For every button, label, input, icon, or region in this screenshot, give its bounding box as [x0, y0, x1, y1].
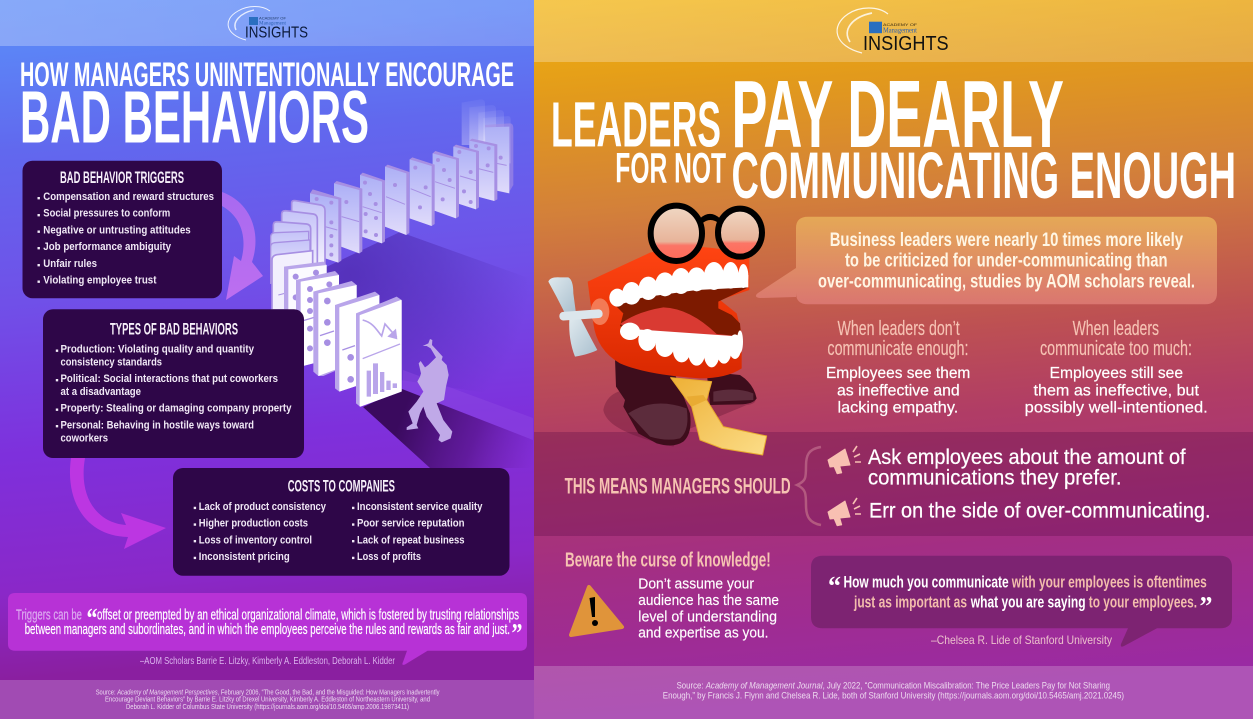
- panel: costs to companies: Lack of product consistency: [199, 501, 327, 513]
- title: [551, 61, 1236, 212]
- logo: AOM Insights: INSIGHTS: [245, 25, 308, 42]
- panel: costs to companies: Inconsistent pricing: [199, 551, 290, 563]
- title: FOR NOT: [615, 144, 726, 192]
- callout: ethical climate quote: offset or preempted by an ethical organizational climate, which is fostered by trusting relationships: [97, 606, 519, 623]
- callout: ethical climate quote: [8, 593, 527, 665]
- panel: bad behavior triggers: Compensation and reward structures: [43, 191, 214, 203]
- icon: wind-up key: [548, 277, 597, 357]
- panel: bad behavior triggers: Unfair rules: [43, 258, 97, 270]
- icon: megaphone 2: [828, 498, 861, 526]
- icon: upper teeth: [609, 262, 748, 307]
- title: BAD BEHAVIORS: [20, 76, 369, 159]
- icon: warning triangle: [571, 587, 622, 635]
- footer: source: Deborah L. Kidder of Columbus State University (https://journals.aom.org/doi/10.5465/amp.2006.19873411): [126, 704, 409, 711]
- icon: brace: [797, 447, 821, 525]
- icon: glasses: [651, 206, 762, 261]
- illustration: running man: [407, 339, 452, 442]
- column: too little communication: communicate enough:: [827, 338, 968, 360]
- logo: AOM Insights: Management: [259, 20, 286, 26]
- panel: bad behavior triggers: Job performance ambiguity: [43, 241, 172, 253]
- icon: tie: [671, 378, 767, 455]
- heading: this means managers should: THIS MEANS MANAGERS SHOULD: [565, 473, 791, 498]
- panel: types of bad behaviors: coworkers: [60, 432, 108, 444]
- panel: bad behavior triggers: [22, 161, 222, 298]
- column: too much communication: When leaders: [1073, 318, 1159, 340]
- panel: types of bad behaviors: Property: Stealing or damaging company property: [60, 403, 292, 415]
- callout: Lide quote: [811, 556, 1232, 647]
- callout: Lide quote: How much you communicate: [844, 573, 1009, 592]
- panel: costs to companies: Loss of profits: [357, 551, 421, 563]
- callout: Lide quote: what you are saying: [970, 592, 1086, 611]
- logo: AOM Insights: ACADEMY OF: [259, 16, 286, 20]
- callout: Lide quote: just as important as: [853, 592, 967, 611]
- column: too little communication: as ineffective and: [837, 382, 960, 399]
- jaw: [588, 247, 749, 378]
- column: too much communication: communicate too much:: [1040, 338, 1192, 360]
- panel: types of bad behaviors: TYPES OF BAD BEHAVIORS: [110, 320, 238, 338]
- callout: 10 times more likely: [756, 217, 1217, 304]
- panel: bad behavior triggers: BAD BEHAVIOR TRIGGERS: [60, 169, 184, 187]
- text: manager actions: communications they prefer.: [868, 467, 1122, 490]
- logo: AOM Insights: INSIGHTS: [863, 33, 949, 55]
- panel: costs to companies: COSTS TO COMPANIES: [288, 478, 395, 496]
- icon: lower teeth: [620, 323, 743, 367]
- footer: source: Enough,” by Francis J. Flynn and Chelsea R. Lide, both of Stanford University (https://journals.aom.org/doi/10.5465/amj.2021.0245): [663, 690, 1124, 701]
- footer: source: Source: Academy of Management Journal, July 2022, “Communication Miscalibration: The Price Leaders Pay for Not Sharing: [677, 680, 1110, 691]
- column: too much communication: Employees still see: [1050, 365, 1183, 382]
- attribution: –Chelsea R. Lide of Stanford University: [931, 633, 1112, 647]
- panel: types of bad behaviors: Political: Social interactions that put coworkers: [60, 373, 278, 385]
- illustration: chattering teeth: [548, 206, 767, 455]
- text: manager actions: [868, 446, 1210, 523]
- column: too little communication: lacking empathy.: [838, 400, 958, 417]
- text: curse of knowledge: Don’t assume your: [638, 575, 754, 592]
- shadow: [603, 388, 756, 447]
- arrow: types to costs: [70, 458, 166, 549]
- panel: bad behavior triggers: Violating employee trust: [43, 274, 157, 286]
- logo: AOM Insights: Management: [883, 26, 917, 34]
- panel: types of bad behaviors: Personal: Behaving in hostile ways toward: [60, 419, 254, 431]
- callout: Lide quote: “: [828, 571, 841, 601]
- callout: Lide quote: to your employees.: [1089, 592, 1197, 611]
- logo: AOM Insights: [837, 8, 949, 55]
- logo: AOM Insights: [228, 6, 308, 42]
- panel: bad behavior triggers: Negative or untrusting attitudes: [43, 224, 191, 236]
- text: curse of knowledge: and expertise as you.: [638, 624, 768, 641]
- heading: beware the curse of knowledge: Beware the curse of knowledge!: [565, 550, 771, 572]
- floor shadows: [320, 232, 534, 468]
- illustration: near row of dominoes: [284, 262, 402, 407]
- column: too little communication: Employees see them: [826, 365, 970, 382]
- text: curse of knowledge: level of understanding: [638, 608, 777, 625]
- mouth: [612, 287, 748, 357]
- panel: bad behaviors infographic: [0, 0, 534, 719]
- panel: costs to companies: Lack of repeat business: [357, 534, 464, 546]
- column: too little communication: [826, 318, 970, 417]
- panel: types of bad behaviors: at a disadvantage: [60, 386, 141, 398]
- text: manager actions: Ask employees about the amount of: [868, 446, 1186, 469]
- callout: Lide quote: ”: [1200, 591, 1212, 621]
- illustration: far row of dominoes: [271, 99, 513, 310]
- panel: costs to companies: [173, 468, 510, 576]
- panel: communication infographic: [534, 0, 1253, 719]
- text: curse of knowledge: audience has the same: [638, 592, 779, 609]
- panel: types of bad behaviors: [43, 309, 304, 458]
- column: too much communication: [1025, 318, 1208, 417]
- arrow: triggers to types: [222, 192, 263, 300]
- footer: source: [663, 680, 1124, 701]
- panel: costs to companies: Loss of inventory control: [199, 534, 312, 546]
- column: too much communication: possibly well-intentioned.: [1025, 400, 1208, 417]
- panel: types of bad behaviors: consistency standards: [60, 356, 162, 368]
- footer: source: Encourage Deviant Behaviors” by Barrie E. Litzky of Drexel University, Kimberly A. Eddleston of Northeastern University, and: [105, 697, 430, 704]
- column: too little communication: When leaders don’t: [838, 318, 960, 340]
- logo: AOM Insights: ACADEMY OF: [883, 22, 918, 27]
- panel: costs to companies: Higher production costs: [199, 518, 308, 530]
- column: too much communication: them as ineffective, but: [1034, 382, 1200, 399]
- panel: types of bad behaviors: Production: Violating quality and quantity: [60, 344, 255, 356]
- icon: shoes: [615, 358, 757, 445]
- icon: megaphone 1: [828, 446, 861, 474]
- panel: bad behavior triggers: Social pressures to conform: [43, 208, 170, 220]
- footer: source: [0, 680, 534, 719]
- title: HOW MANAGERS UNINTENTIONALLY ENCOURAGE: [20, 56, 514, 94]
- text: manager actions: Err on the side of over-communicating.: [869, 500, 1210, 523]
- panel: costs to companies: Poor service reputation: [357, 518, 465, 530]
- title: [20, 56, 514, 159]
- footer: source: Source: Academy of Management Perspectives, February 2006, “The Good, the Bad, and the Misguided: How Managers Inadvertently: [96, 689, 440, 696]
- title: LEADERS: [551, 89, 721, 161]
- callout: ethical climate quote: Triggers can be: [16, 606, 82, 623]
- callout: ethical climate quote: ”: [512, 618, 522, 648]
- callout: ethical climate quote: between managers and subordinates, and in which the employees perceive the rules and rewards as fair and just.: [25, 621, 510, 638]
- attribution: –AOM Scholars Barrie E. Litzky, Kimberly A. Eddleston, Deborah L. Kidder: [140, 655, 395, 667]
- text: curse of knowledge: [638, 575, 779, 641]
- callout: ethical climate quote: “: [86, 603, 98, 633]
- panel: costs to companies: Inconsistent service quality: [357, 501, 483, 513]
